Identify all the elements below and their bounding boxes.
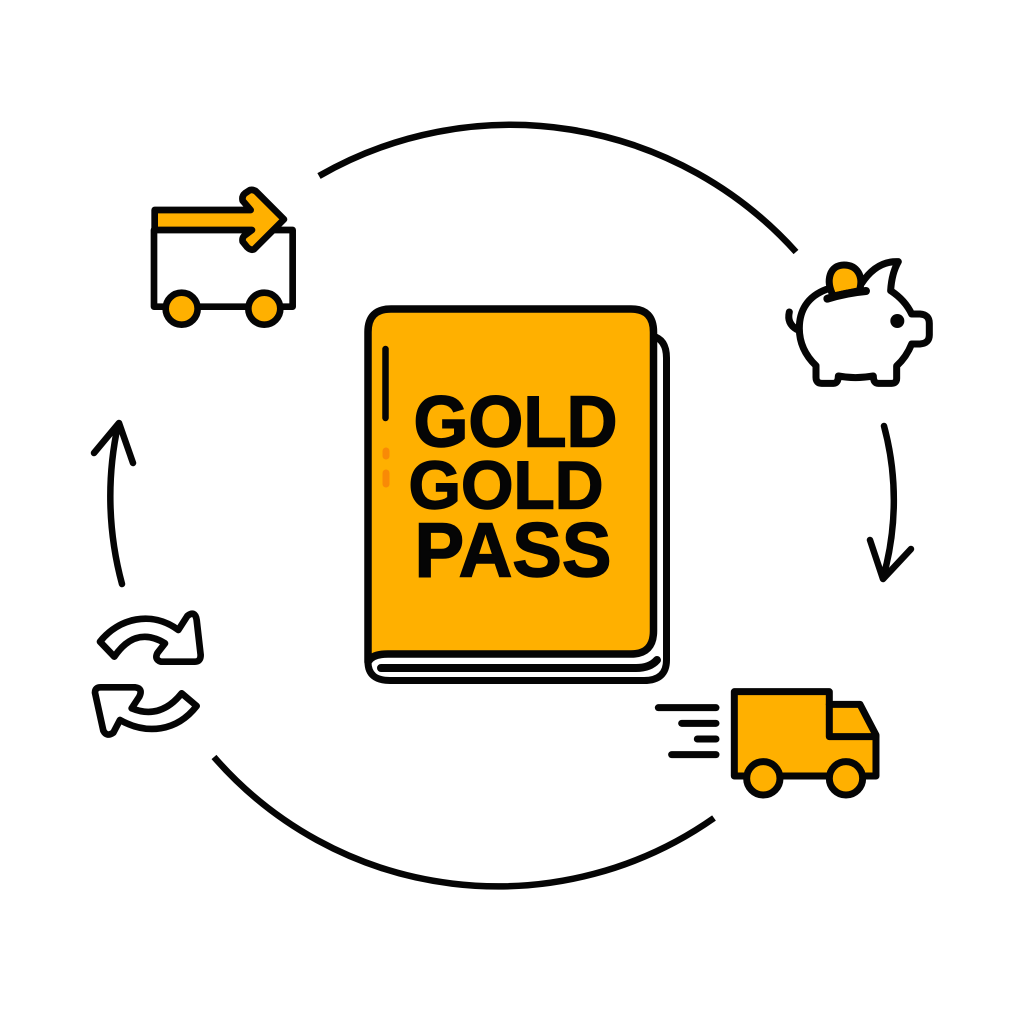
central book: gold pass <box>368 309 666 680</box>
van wheel right <box>829 762 863 795</box>
book inner page line <box>381 660 657 668</box>
pig eye <box>890 314 904 328</box>
van body <box>734 692 876 776</box>
coin slot <box>827 291 866 299</box>
icon: delivery van <box>658 692 876 795</box>
icon: cart with arrow <box>154 190 293 325</box>
gold coin <box>829 265 861 296</box>
van cab window line <box>829 704 876 737</box>
icon: exchange arrows <box>95 614 201 735</box>
book spine mark <box>382 349 389 418</box>
cart body <box>154 230 293 307</box>
book cover <box>368 309 654 662</box>
book title: GOLD <box>408 448 604 524</box>
cart wheel right <box>248 293 280 325</box>
book title: PASS <box>414 508 612 594</box>
pig tail <box>789 312 797 329</box>
pig body <box>799 262 929 383</box>
van wheel left <box>747 762 780 795</box>
book title: GOLD <box>414 382 618 462</box>
lower curved arrow <box>95 687 197 735</box>
book back pages <box>368 336 666 680</box>
arrow: right, from piggy bank to van <box>870 426 911 579</box>
spine orange dots <box>382 451 390 484</box>
yellow arrow <box>155 190 284 250</box>
icon: piggy bank <box>789 262 929 383</box>
speed lines <box>658 708 716 755</box>
arc: bottom, from van to recycle icon <box>214 757 714 886</box>
upper curved arrow <box>100 614 201 662</box>
arrow: left, from recycle icon to cart <box>94 423 133 584</box>
cart wheel left <box>166 293 198 325</box>
arc: top, from cart to piggy bank <box>319 125 796 252</box>
book title <box>408 382 618 594</box>
